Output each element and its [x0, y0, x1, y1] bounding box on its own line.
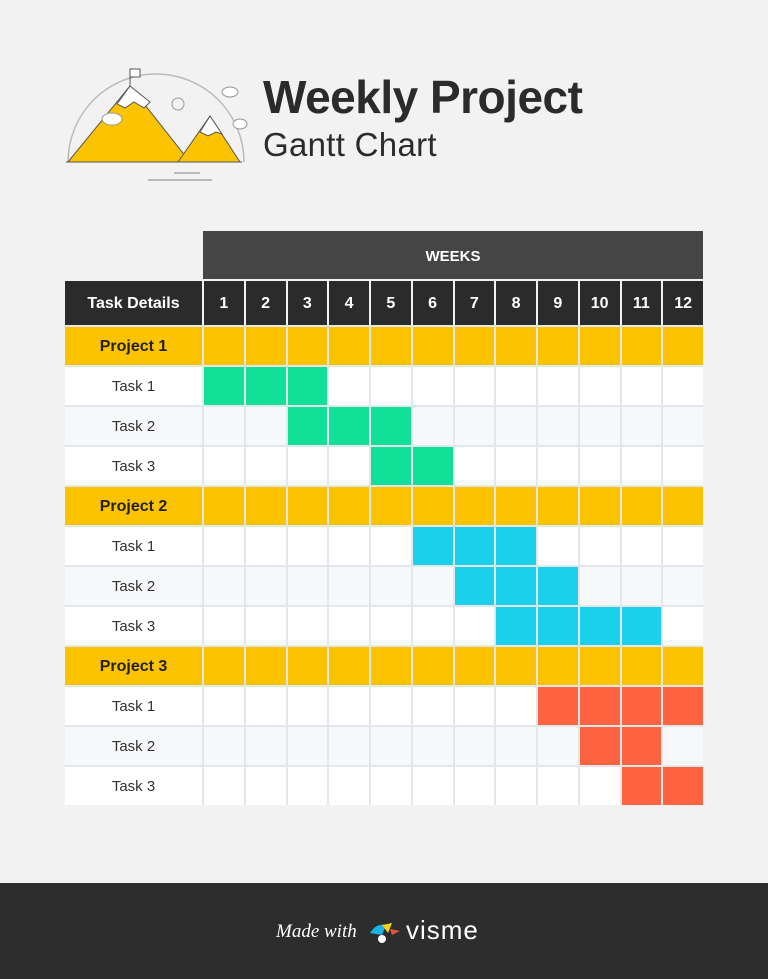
p2 task 2 [65, 567, 703, 605]
weeks header: WEEKS [425, 248, 480, 265]
header row: 4 [345, 295, 354, 312]
p2 task 1 [65, 527, 703, 565]
title [263, 71, 582, 163]
footer [0, 883, 768, 979]
header row: 3 [303, 295, 312, 312]
project 2 row [65, 487, 703, 525]
header row: Task Details [87, 295, 180, 312]
header row [65, 281, 703, 325]
gantt table [65, 281, 703, 805]
header row: 11 [633, 295, 650, 312]
header row: 5 [386, 295, 395, 312]
header row: 7 [470, 295, 479, 312]
p2 task 2: Task 2 [112, 578, 155, 595]
project 1 row [65, 327, 703, 365]
p3 task 3 [65, 767, 703, 805]
p3 task 2 [65, 727, 703, 765]
header row: 12 [674, 295, 692, 312]
p1 task 1 [65, 367, 703, 405]
project 3 row [65, 647, 703, 685]
p3 task 1: Task 1 [112, 698, 155, 715]
footer brand text: Made with [276, 921, 357, 942]
header row: 9 [553, 295, 562, 312]
title: Weekly Project [263, 71, 582, 123]
title: Gantt Chart [263, 126, 437, 163]
footer brand text: visme [406, 915, 479, 945]
icon: visme logo [370, 923, 400, 943]
header row: 2 [261, 295, 270, 312]
footer brand text [276, 915, 479, 945]
p1 task 2: Task 2 [112, 418, 155, 435]
weeks header [203, 231, 703, 279]
p1 task 3 [65, 447, 703, 485]
p1 task 1: Task 1 [112, 378, 155, 395]
header row: 1 [219, 295, 228, 312]
p1 task 3: Task 3 [112, 458, 155, 475]
p3 task 3: Task 3 [112, 778, 155, 795]
project 3 row: Project 3 [100, 658, 167, 675]
p3 task 2: Task 2 [112, 738, 155, 755]
header row: 6 [428, 295, 437, 312]
header row: 8 [512, 295, 521, 312]
p2 task 1: Task 1 [112, 538, 155, 555]
icon: mountain illustration [66, 68, 248, 181]
header row: 10 [591, 295, 609, 312]
p3 task 1 [65, 687, 703, 725]
p1 task 2 [65, 407, 703, 445]
project 1 row: Project 1 [100, 338, 167, 355]
p2 task 3 [65, 607, 703, 645]
project 2 row: Project 2 [100, 498, 167, 515]
p2 task 3: Task 3 [112, 618, 155, 635]
